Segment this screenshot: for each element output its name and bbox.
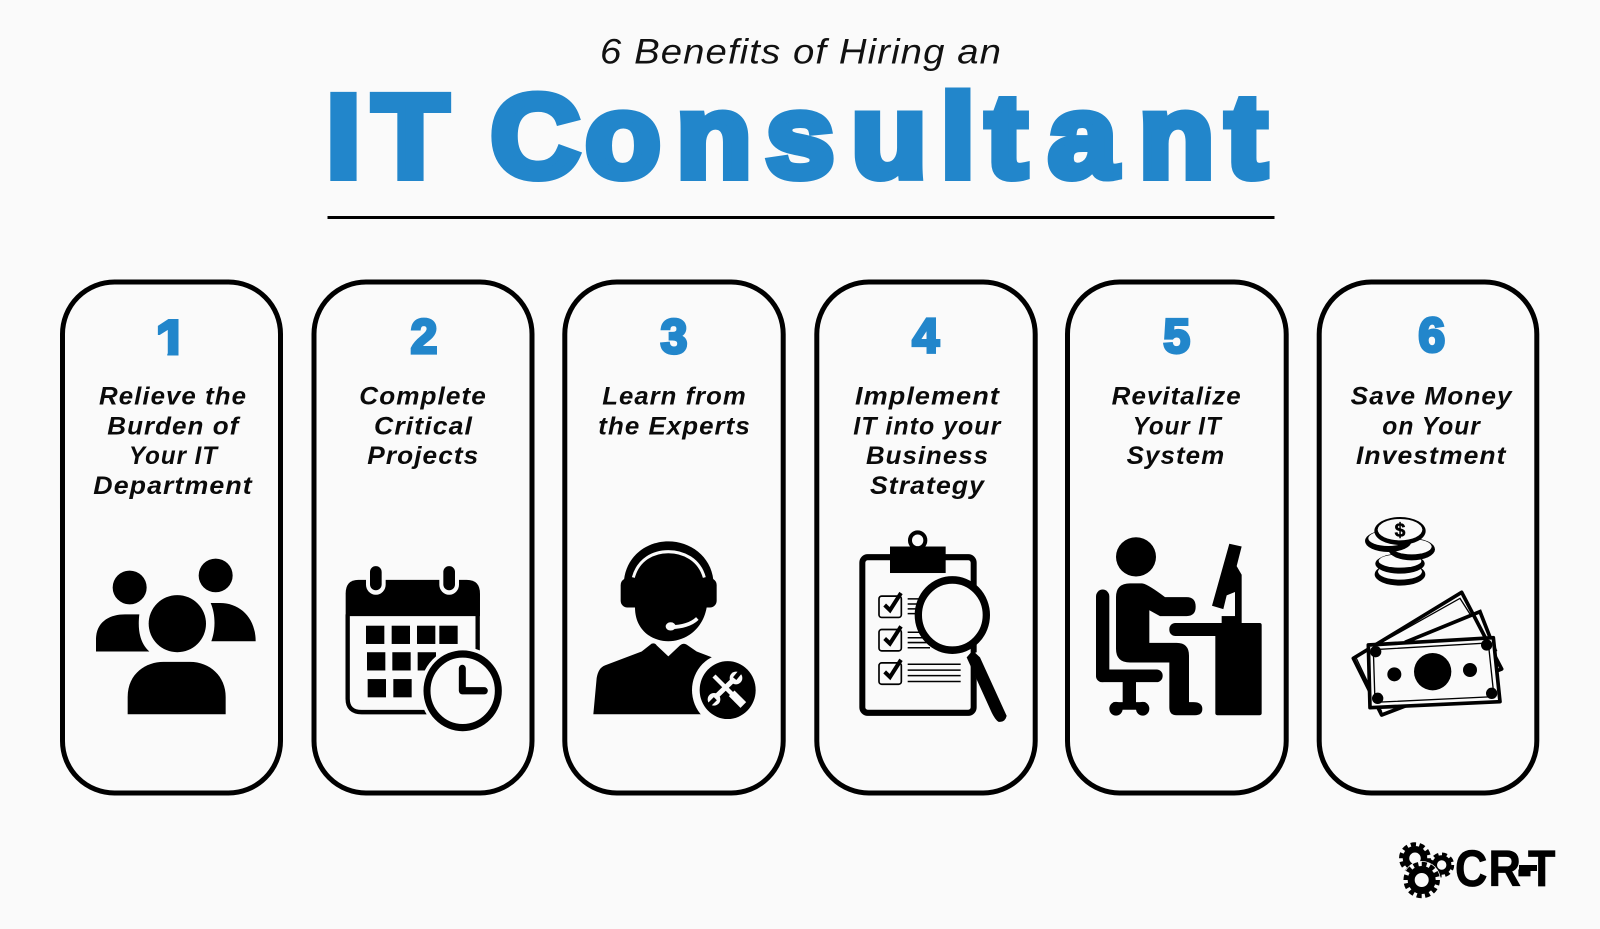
subtitle: 6 Benefits of Hiring an: [600, 32, 1002, 72]
text: benefit 4: Strategy: [870, 472, 985, 500]
text: benefit 6: Save Money: [1351, 382, 1513, 410]
text: benefit 3: Learn from: [602, 382, 747, 410]
text: benefit 4: Business: [866, 442, 989, 470]
text: benefit 2: Projects: [367, 442, 479, 470]
text: benefit 2: Critical: [374, 412, 473, 440]
number 1: 1: [155, 308, 189, 374]
text: benefit 5: Revitalize: [1112, 382, 1242, 410]
text: benefit 1: Relieve the: [99, 382, 247, 410]
number 5: 5: [1163, 310, 1190, 364]
icon: coins and banknotes: [1353, 517, 1502, 715]
text: benefit 4: [853, 382, 1002, 500]
icon: calendar with clock: [346, 566, 505, 735]
text: benefit 4: Implement: [855, 382, 1001, 410]
title: IT Consultant: [326, 70, 1267, 202]
panel: benefit 3: [565, 282, 783, 793]
text: benefit 6: Investment: [1356, 442, 1507, 470]
panel: benefit 4: [817, 282, 1035, 793]
number 6: 6: [1418, 310, 1445, 362]
logo wordmark: CR-T: [1455, 841, 1555, 898]
logo: CR-T: [1401, 841, 1555, 899]
icon: clipboard with magnifier: [862, 532, 1007, 722]
text: benefit 5: [1112, 382, 1242, 470]
panel: benefit 6: [1319, 282, 1537, 793]
text: benefit 6: on Your: [1382, 412, 1481, 440]
panel: benefit 1: [62, 282, 280, 793]
text: benefit 2: [359, 382, 487, 470]
text: benefit 5: Your IT: [1133, 412, 1223, 440]
icon: coins and banknotes: $: [1395, 521, 1406, 542]
number 4: 4: [912, 310, 939, 364]
text: benefit 1: [93, 382, 254, 500]
icon: people group: [96, 559, 256, 714]
text: benefit 6: [1351, 382, 1513, 470]
text: benefit 1: Your IT: [129, 442, 220, 470]
icon: gears: [1401, 844, 1453, 899]
icon: support agent with tools: [593, 541, 763, 727]
text: benefit 3: [598, 382, 751, 440]
number 3: 3: [661, 311, 687, 364]
text: benefit 5: System: [1127, 442, 1225, 470]
text: benefit 3: the Experts: [598, 412, 751, 440]
panel: benefit 2: [314, 282, 532, 793]
text: benefit 1: Burden of: [107, 412, 241, 440]
icon: person at computer: [1096, 537, 1262, 716]
panel: benefit 5: [1068, 282, 1286, 793]
text: benefit 1: Department: [93, 472, 254, 500]
text: benefit 4: IT into your: [853, 412, 1002, 440]
text: benefit 2: Complete: [359, 382, 487, 410]
number 2: 2: [411, 311, 437, 364]
